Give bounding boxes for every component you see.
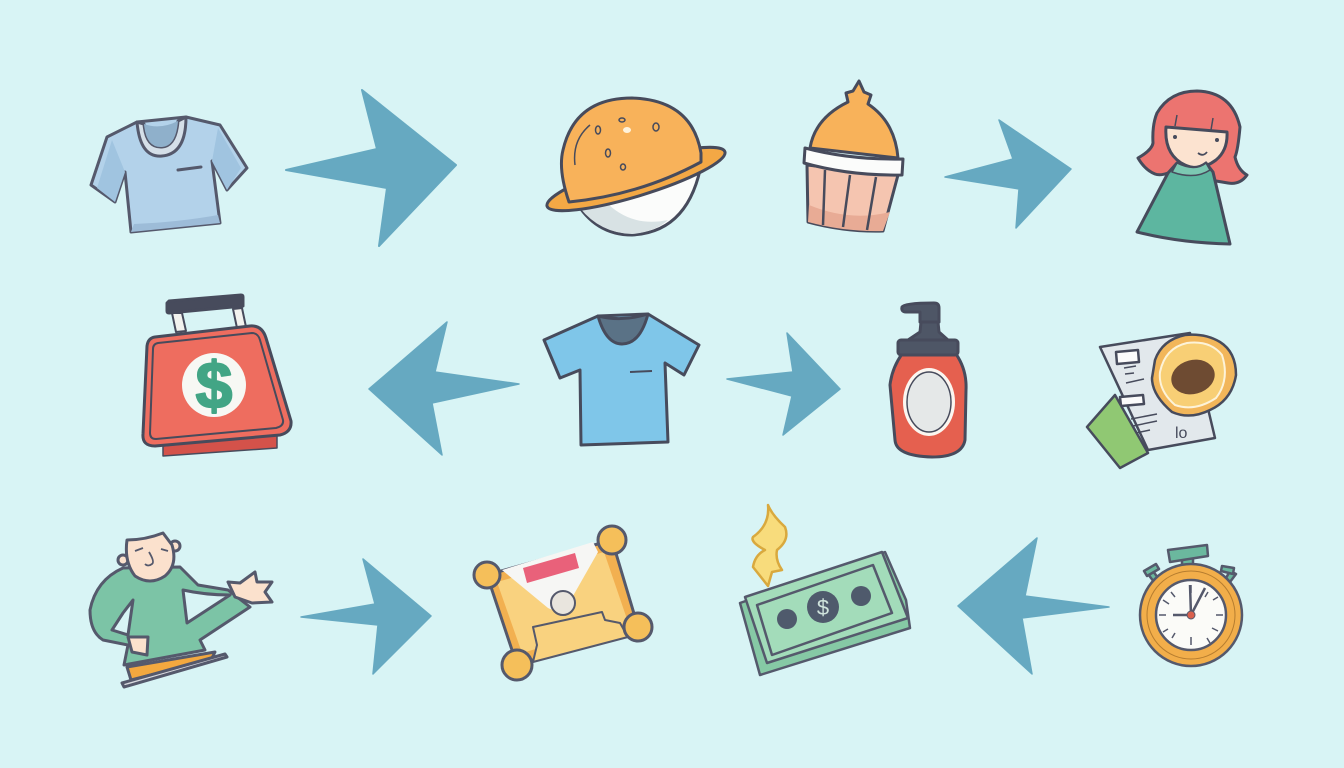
icon: stopwatch <box>1140 545 1242 666</box>
icon: cupcake <box>804 81 903 231</box>
arrow: row 3 right <box>301 559 431 674</box>
icon: blue t-shirt <box>544 314 699 445</box>
icon: red-haired girl <box>1137 91 1247 244</box>
arrow: row 1 large right <box>286 90 456 246</box>
icon: pump bottle <box>890 303 966 457</box>
icon: money stack with flame <box>740 505 910 675</box>
icon: light blue t-shirt <box>91 117 247 232</box>
icon: orange planet bun <box>542 98 730 235</box>
icon: red dollar bag <box>143 295 291 456</box>
icon: money stack with flame: $ <box>817 595 829 620</box>
arrow: row 2 small right <box>727 333 840 435</box>
icon: red dollar bag: $ <box>196 348 232 422</box>
icon: yellow envelope <box>474 526 652 680</box>
arrow: row 1 small right <box>945 120 1071 228</box>
arrow: row 3 left <box>958 538 1109 674</box>
arrow: row 2 left <box>369 322 519 455</box>
icon: document with seed circle and bill: lo <box>1175 425 1188 442</box>
icon: document with seed circle and bill <box>1087 333 1236 468</box>
icon: man in green sweater <box>90 533 272 687</box>
